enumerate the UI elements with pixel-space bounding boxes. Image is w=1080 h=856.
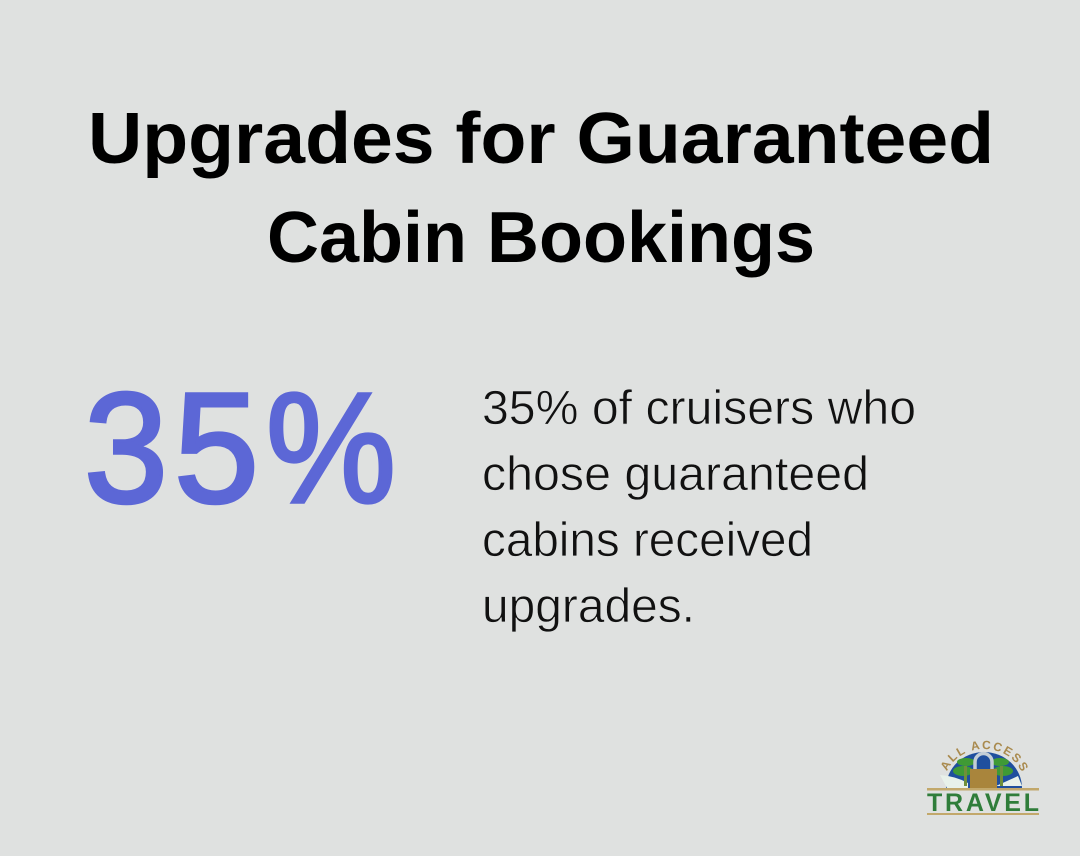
logo padlock [970,754,997,789]
big statistic: 35%: 5 [174,361,259,536]
title [88,99,994,278]
logo: All Access Travel [927,740,1039,817]
logo wordmark: TRAVEL [927,789,1039,817]
description text: upgrades. [482,580,695,633]
big statistic: 35%: % [266,361,396,536]
logo palms [953,758,1013,786]
logo rules [927,788,1039,790]
logo: All Access Travel: ALL ACCESS [942,740,1028,771]
title: Upgrades for Guaranteed [88,99,994,179]
description text: chose guaranteed [482,448,869,501]
logo dome [946,752,1022,788]
logo boats [940,775,1022,788]
big statistic: 35%: 3 [84,361,168,536]
description text [482,382,916,633]
description text: 35% of cruisers who [482,382,916,435]
description text: cabins received [482,514,813,567]
title: Cabin Bookings [267,198,815,278]
logo arc text [944,749,1024,785]
big statistic: 35% [84,361,396,536]
